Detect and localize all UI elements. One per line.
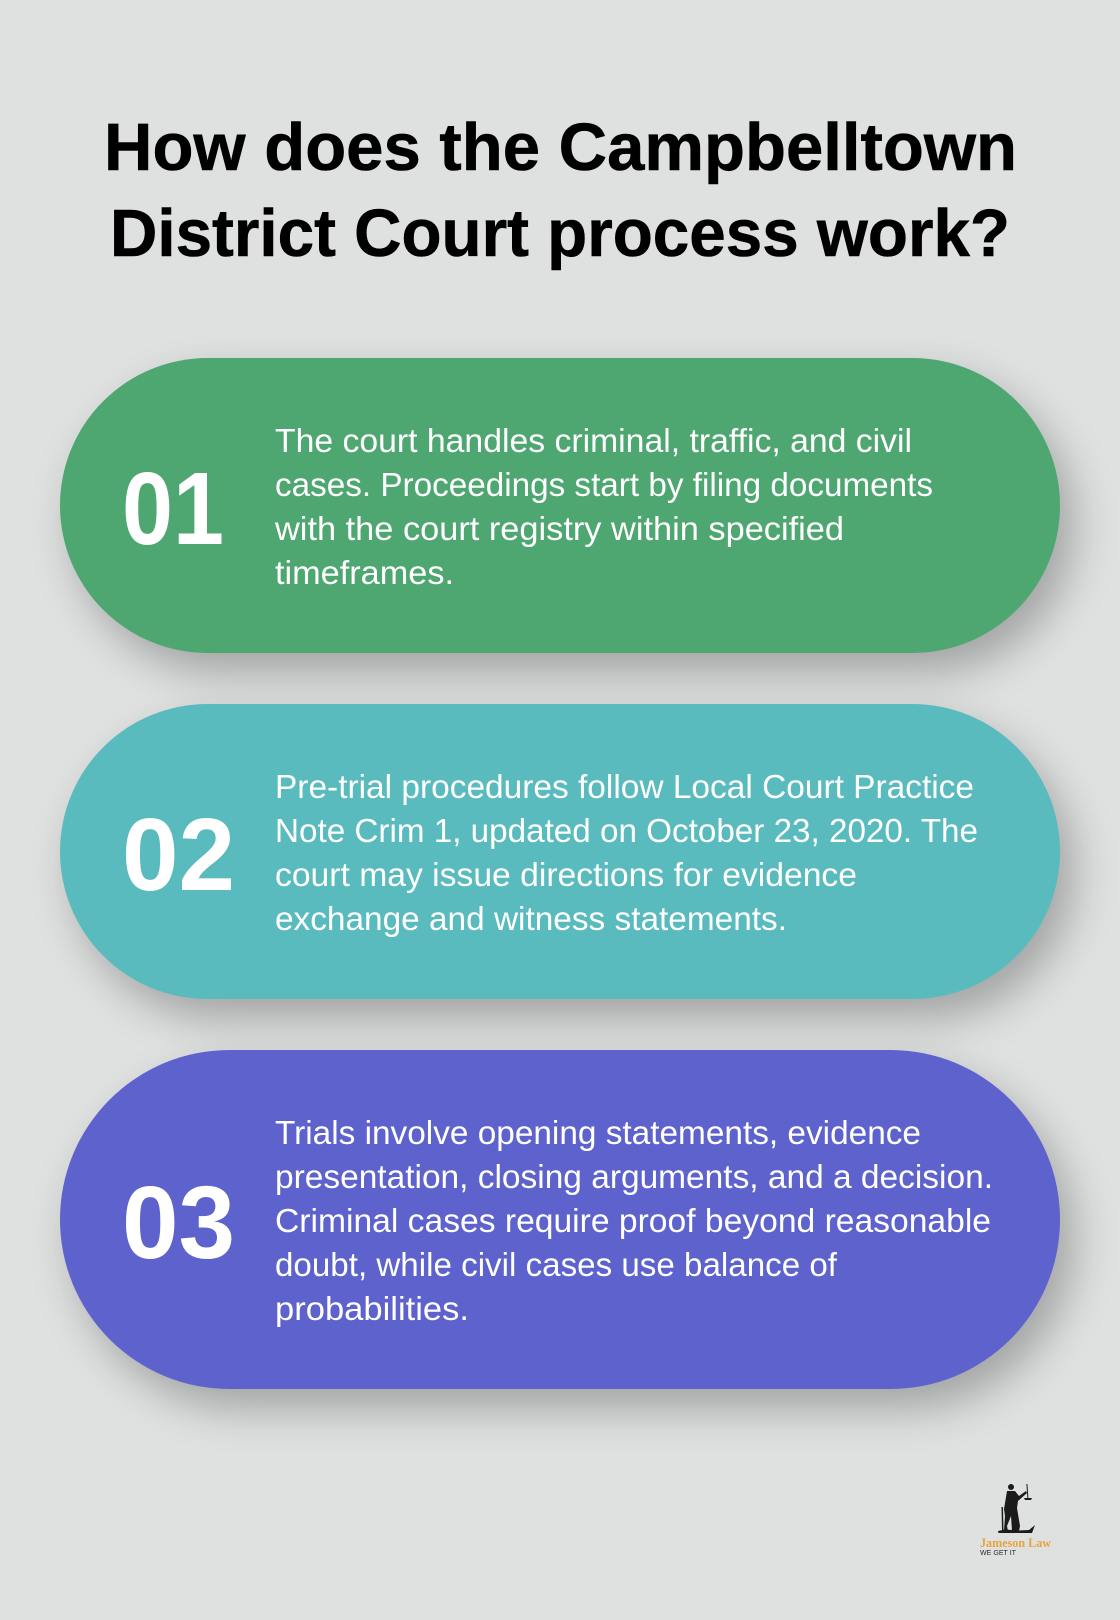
title: District Court process work?	[110, 196, 1010, 271]
logo: Jameson Law	[980, 1484, 1052, 1557]
step 03 text: presentation, closing arguments, and a decision.	[275, 1158, 993, 1195]
step 03 text	[275, 1114, 993, 1327]
title	[104, 110, 1017, 271]
step 01 text: with the court registry within specified	[274, 510, 844, 547]
step 01 text	[274, 422, 933, 591]
step 03 text: Criminal cases require proof beyond reasonable	[275, 1202, 991, 1239]
step 03 text: Trials involve opening statements, evidence	[275, 1114, 921, 1151]
step 01 text: cases. Proceedings start by filing documents	[275, 466, 933, 503]
step 02 text: Pre-trial procedures follow Local Court Practice	[275, 768, 974, 805]
step 01 number: 01	[122, 451, 224, 566]
icon: lady justice	[998, 1484, 1035, 1533]
step 02 text: court may issue directions for evidence	[275, 856, 857, 893]
logo tagline: WE GET IT	[980, 1548, 1016, 1557]
step 02 number: 02	[122, 797, 235, 912]
step 02 text	[275, 768, 978, 937]
step 01 text: The court handles criminal, traffic, and civil	[275, 422, 912, 459]
panel: step 01 background	[60, 358, 1060, 653]
step 02 text: Note Crim 1, updated on October 23, 2020. The	[275, 812, 978, 849]
title: How does the Campbelltown	[104, 110, 1017, 185]
panel: step 02 background	[60, 704, 1060, 999]
logo name: Jameson Law	[980, 1535, 1052, 1550]
panel: step 03 background	[60, 1050, 1060, 1389]
step 02 text: exchange and witness statements.	[275, 900, 787, 937]
step 03 text: doubt, while civil cases use balance of	[275, 1246, 838, 1283]
step 01 text: timeframes.	[275, 554, 454, 591]
step 03 number: 03	[122, 1165, 235, 1280]
step 03 text: probabilities.	[275, 1290, 469, 1327]
